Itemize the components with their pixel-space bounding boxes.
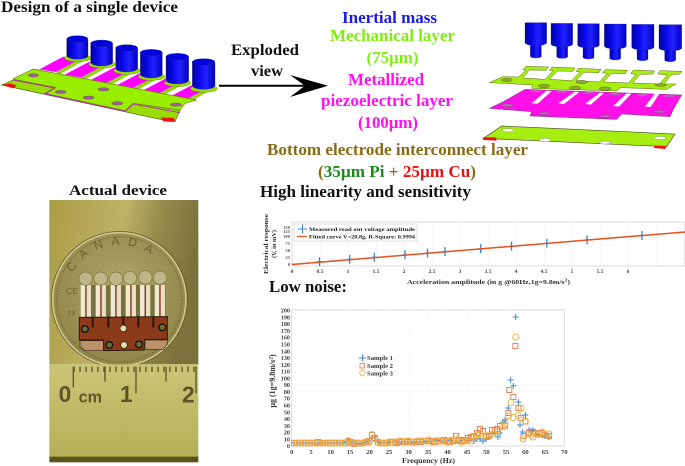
x axis ticks: 5.5 xyxy=(596,269,604,275)
x axis ticks: 15 xyxy=(347,449,354,456)
legend: Measured read out voltage amplitude xyxy=(309,227,416,233)
chart: electrical response vs acceleration xyxy=(263,214,685,286)
y axis ticks: 20 xyxy=(284,430,290,437)
x axis ticks: 35 xyxy=(425,449,432,456)
piezoelectric layer xyxy=(489,89,682,119)
legend: Sample 1 xyxy=(367,355,393,362)
bottom electrode layer xyxy=(483,126,675,149)
x axis ticks: 4 xyxy=(515,269,518,275)
label: exploded view xyxy=(231,42,299,80)
y axis ticks xyxy=(283,225,291,267)
y axis ticks: 150 xyxy=(281,342,290,348)
photo: actual device on coin with ruler xyxy=(49,200,198,462)
green pads under the cylinders xyxy=(64,54,217,92)
y axis ticks: 170 xyxy=(281,328,290,335)
y axis ticks: 190 xyxy=(281,314,290,321)
y axis ticks: 110 xyxy=(281,369,290,376)
x axis ticks: 20 xyxy=(366,449,374,456)
ruler xyxy=(49,364,198,462)
x axis ticks: 65 xyxy=(542,449,549,456)
y axis ticks: 0 xyxy=(287,443,290,450)
y axis ticks: 0 xyxy=(288,262,291,267)
y axis ticks: 90 xyxy=(284,382,290,389)
plot area xyxy=(292,310,564,446)
x axis ticks: 30 xyxy=(405,449,412,456)
y axis ticks: 25 xyxy=(285,255,291,260)
chart: noise spectrum xyxy=(268,308,568,465)
x axis ticks: 25 xyxy=(386,449,393,456)
x axis ticks: 3 xyxy=(459,269,462,275)
y axis ticks: 10 xyxy=(284,436,290,443)
layer legend labels: Inertial mass xyxy=(342,8,438,27)
legend: Sample 2 xyxy=(367,363,393,370)
chart: electrical response vs acceleration: ) xyxy=(567,279,570,286)
y axis ticks: 120 xyxy=(281,362,290,369)
x axis ticks: 2 xyxy=(403,269,406,275)
x axis ticks: 1.5 xyxy=(372,269,380,275)
label: exploded view: Exploded xyxy=(231,42,299,59)
ruler: 1 xyxy=(120,381,133,407)
x axis ticks: 0 xyxy=(291,269,294,275)
legend xyxy=(294,224,417,241)
x axis ticks: 40 xyxy=(444,449,452,456)
axis labels: Electrical response xyxy=(263,214,270,274)
x axis ticks: 3.5 xyxy=(484,269,492,275)
x axis ticks: 70 xyxy=(561,449,568,456)
y axis ticks xyxy=(281,308,290,450)
x axis ticks: 6 xyxy=(627,269,630,275)
y axis ticks: 60 xyxy=(284,402,290,410)
y axis ticks: 100 xyxy=(281,375,290,382)
ruler: 0 xyxy=(59,381,71,407)
arrow: exploded view xyxy=(219,75,328,97)
y axis ticks: 30 xyxy=(284,423,290,430)
bottom layer with red contact tips xyxy=(2,80,180,122)
inertial mass cylinders with stems xyxy=(525,23,682,62)
legend: Fitted curve V=20.8g, R-Square: 0.9994 xyxy=(309,234,415,240)
label: exploded view: view xyxy=(251,63,284,80)
mechanical plate xyxy=(13,69,197,113)
y axis ticks: 40 xyxy=(284,416,290,423)
y axis ticks: 130 xyxy=(281,355,290,362)
layer legend labels: (75µm) xyxy=(366,48,418,67)
y axis ticks: 150 xyxy=(283,225,291,230)
series: sample 2 xyxy=(294,346,549,444)
layer legend labels: (35µm Pi + 25µm Cu) xyxy=(318,162,476,181)
x axis ticks: 10 xyxy=(327,449,335,456)
y axis ticks: 140 xyxy=(281,348,290,355)
interconnect board xyxy=(79,317,167,351)
chart: electrical response vs acceleration: 2 xyxy=(565,278,568,282)
x axis ticks: 50 xyxy=(483,449,490,456)
y axis ticks: 50 xyxy=(284,409,290,416)
x axis ticks: 5 xyxy=(571,269,574,275)
legend: Sample 3 xyxy=(367,370,393,378)
heading: low noise: Low noise: xyxy=(269,277,347,296)
x axis ticks: 45 xyxy=(464,449,471,456)
illustration: exploded device xyxy=(483,23,682,149)
layer legend labels: Mechanical layer xyxy=(330,26,455,45)
layer legend labels: Metallized xyxy=(348,70,424,89)
x axis ticks: 0.5 xyxy=(316,269,324,275)
x axis ticks: 60 xyxy=(522,449,529,456)
coin xyxy=(51,231,188,364)
legend xyxy=(358,353,394,378)
data markers xyxy=(320,236,642,262)
y axis ticks: 50 xyxy=(285,248,291,253)
plot area xyxy=(292,222,685,266)
illustration: assembled device xyxy=(2,36,217,122)
x axis ticks: 1 xyxy=(347,269,350,275)
fitted line xyxy=(292,232,685,264)
photo background xyxy=(49,200,198,364)
chart: electrical response vs acceleration: Acceleration amplitude (in g @60Hz,1g=9.8m/s xyxy=(407,279,536,286)
coin: 19 xyxy=(67,308,75,317)
axis labels: ) xyxy=(268,354,277,357)
y axis ticks: 160 xyxy=(281,335,290,342)
x axis ticks: 5 xyxy=(309,449,313,456)
cantilever fingers xyxy=(39,57,213,101)
mechanical layer xyxy=(489,66,682,91)
y axis ticks: 70 xyxy=(284,396,290,403)
chart: electrical response vs acceleration: (V, in mV) xyxy=(271,230,278,258)
y axis ticks: 75 xyxy=(285,241,291,246)
y axis ticks: 125 xyxy=(283,229,291,234)
coin: CE xyxy=(66,286,78,296)
y axis ticks: 80 xyxy=(284,389,290,396)
series: sample 1 xyxy=(294,317,549,444)
y axis ticks: 200 xyxy=(281,308,290,315)
x axis ticks: 55 xyxy=(503,449,510,456)
x axis ticks: 0 xyxy=(290,449,294,456)
heading: high linearity and sensitivity: High linearity and sensitivity xyxy=(260,182,472,201)
layer legend labels: Bottom electrode interconnect layer xyxy=(267,140,528,159)
ruler: 2 xyxy=(182,382,195,408)
axis labels: 2 xyxy=(268,357,274,360)
y axis ticks: 180 xyxy=(281,321,290,328)
x axis ticks xyxy=(290,449,568,456)
layer legend labels xyxy=(267,8,528,181)
x axis ticks xyxy=(291,269,630,275)
heading: actual device: Actual device xyxy=(69,183,167,199)
inertial mass cylinders xyxy=(67,36,215,89)
ruler: cm xyxy=(79,387,102,406)
chart: noise spectrum: Frequency (Hz) xyxy=(402,456,455,465)
x axis ticks: 4.5 xyxy=(540,269,548,275)
axis labels: µg (1g=9.8m/s xyxy=(268,360,277,408)
coin: CANADA xyxy=(67,236,152,271)
x axis ticks: 2.5 xyxy=(428,269,436,275)
y axis ticks: 100 xyxy=(283,234,291,239)
layer legend labels: piezoelectric layer xyxy=(321,91,453,110)
device fingers xyxy=(81,285,166,317)
series: sample 3 xyxy=(294,337,549,443)
layer legend labels: (100µm) xyxy=(358,113,418,132)
inertial masses xyxy=(79,271,167,285)
